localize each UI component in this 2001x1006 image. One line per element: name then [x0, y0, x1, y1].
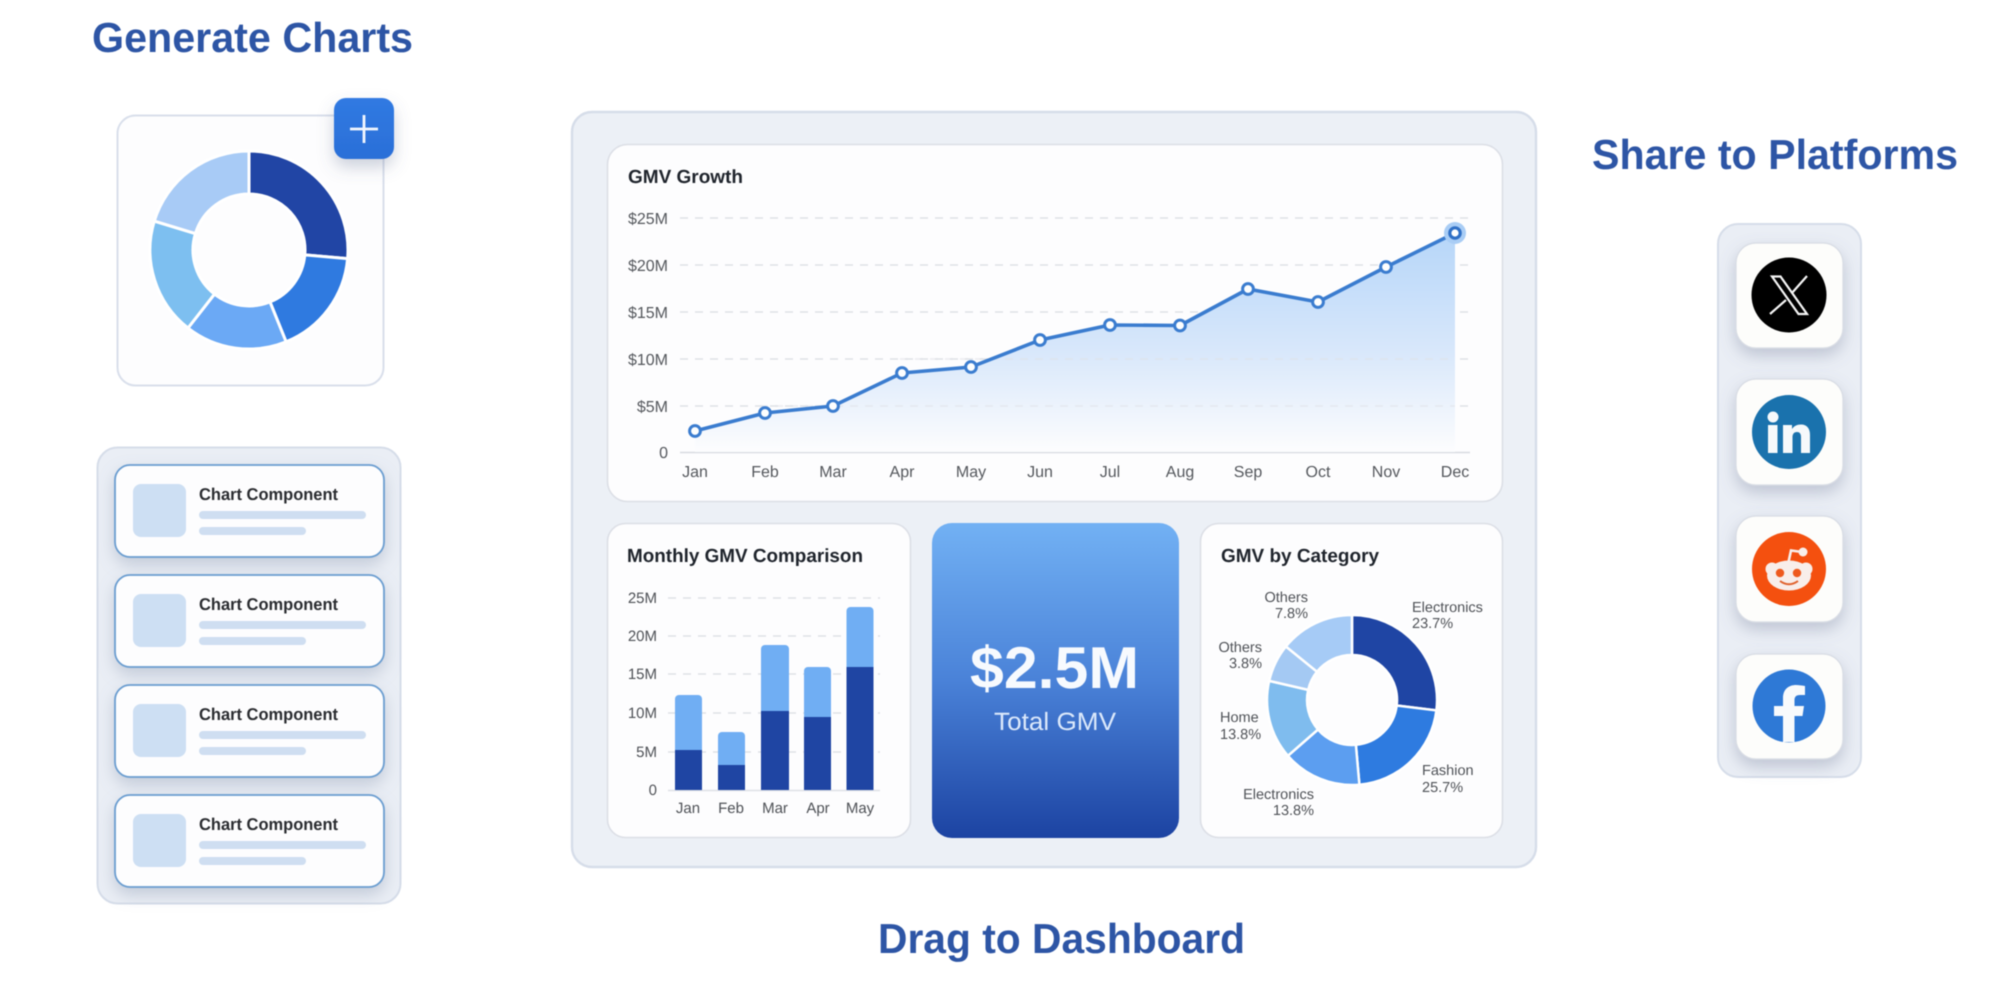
y axis labels: 25M — [628, 590, 657, 607]
x axis labels: Mar — [819, 464, 847, 481]
x axis labels: May — [956, 464, 986, 481]
x axis labels: Sep — [1234, 464, 1262, 481]
y axis labels: $15M — [628, 305, 668, 322]
panel: GMV Growth line chart — [608, 144, 1502, 502]
heading: Monthly GMV Comparison: Monthly GMV Comparison — [627, 546, 863, 567]
card: chart component 1 — [115, 465, 384, 557]
x axis labels — [676, 800, 875, 817]
y axis labels — [628, 211, 668, 462]
donut labels: 25.7% — [1422, 780, 1463, 796]
card: chart component 3: Chart Component — [199, 705, 338, 724]
donut labels: Fashion — [1422, 763, 1474, 779]
y axis labels: $25M — [628, 211, 668, 228]
label: Total GMV — [994, 708, 1116, 736]
panel: Monthly GMV Comparison bar chart — [608, 524, 910, 838]
heading: GMV by Category: GMV by Category — [1221, 546, 1379, 567]
y axis labels: $20M — [628, 258, 668, 275]
icon: Reddit — [1736, 516, 1843, 622]
x axis labels: Jan — [682, 464, 708, 481]
donut labels: 23.7% — [1412, 616, 1453, 632]
y axis labels — [628, 590, 657, 799]
x axis labels: Mar — [762, 800, 788, 817]
x axis labels: Apr — [806, 800, 830, 817]
donut labels: Others — [1264, 590, 1308, 606]
heading: Drag to Dashboard: Drag to Dashboard — [878, 915, 1245, 962]
x axis labels: Jul — [1100, 464, 1120, 481]
panel: chart component list — [98, 448, 400, 904]
heading: GMV Growth: GMV Growth — [628, 167, 743, 188]
card: chart component 4: Chart Component — [199, 815, 338, 834]
y axis labels: 20M — [628, 628, 657, 645]
x axis labels: May — [846, 800, 875, 817]
donut labels: 3.8% — [1229, 656, 1262, 672]
y axis labels: 0 — [649, 782, 657, 799]
heading: Share to Platforms: Share to Platforms — [1592, 131, 1958, 178]
line series with markers — [690, 222, 1466, 436]
x axis labels: Jan — [676, 800, 700, 817]
panel: dashboard — [572, 112, 1536, 867]
x axis labels: Apr — [890, 464, 915, 481]
y axis labels: 5M — [636, 744, 657, 761]
y axis labels: 10M — [628, 705, 657, 722]
donut labels: 7.8% — [1275, 606, 1308, 622]
x axis labels: Aug — [1166, 464, 1194, 481]
x axis labels: Feb — [751, 464, 779, 481]
card: chart component 1: Chart Component — [199, 485, 338, 504]
x axis labels: Dec — [1441, 464, 1469, 481]
card: chart component 2: Chart Component — [199, 595, 338, 614]
icon: Facebook — [1736, 654, 1843, 759]
donut labels: 13.8% — [1220, 727, 1261, 743]
icon: LinkedIn — [1736, 379, 1843, 485]
stacked bars — [675, 607, 874, 790]
chart: small donut — [150, 151, 348, 349]
card: chart component 4 — [115, 795, 384, 887]
donut labels: Electronics — [1412, 600, 1483, 616]
icon: plus button — [334, 98, 394, 159]
donut labels: 13.8% — [1273, 803, 1314, 819]
card: chart component 3 — [115, 685, 384, 777]
x axis labels: Oct — [1306, 464, 1331, 481]
y axis labels: 15M — [628, 666, 657, 683]
x axis labels: Nov — [1372, 464, 1400, 481]
donut labels: Home — [1220, 710, 1259, 726]
y axis labels: $10M — [628, 352, 668, 369]
y axis labels: $5M — [637, 399, 668, 416]
y axis labels: 0 — [659, 445, 668, 462]
panel: GMV by Category donut — [1200, 524, 1502, 838]
heading: Generate Charts: Generate Charts — [92, 14, 413, 61]
card: chart component 2 — [115, 575, 384, 667]
value: $2.5M — [970, 635, 1139, 701]
chart: category donut — [1267, 615, 1437, 785]
panel: Total GMV KPI — [932, 523, 1179, 838]
donut labels: Others — [1218, 640, 1262, 656]
x axis labels — [682, 464, 1469, 481]
donut labels — [1218, 590, 1483, 819]
panel: generated donut chart card — [118, 98, 394, 386]
donut labels: Electronics — [1243, 787, 1314, 803]
x axis labels: Jun — [1027, 464, 1053, 481]
area fill — [695, 233, 1455, 452]
x axis labels: Feb — [718, 800, 744, 817]
panel: social platforms — [1718, 224, 1861, 777]
icon: X — [1736, 243, 1843, 348]
